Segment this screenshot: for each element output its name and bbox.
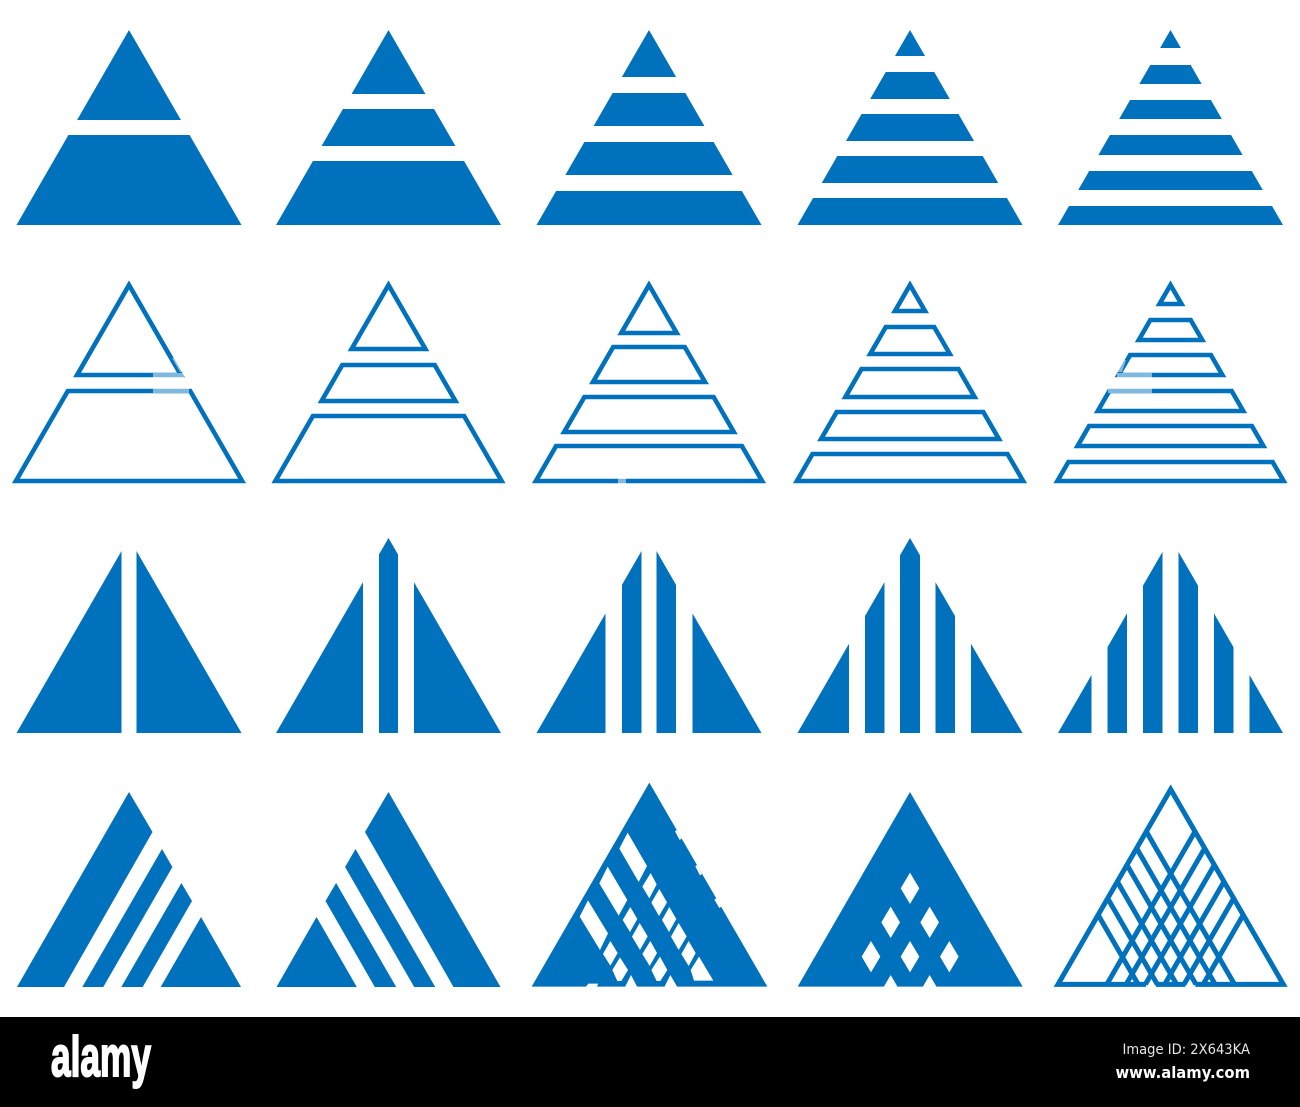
icon: outlined pyramid with 2 bands: [16, 285, 242, 481]
icon: solid pyramid with 6 bands: [1058, 30, 1284, 225]
icon: pyramid split into 5 vertical parts: [797, 538, 1023, 733]
icon: outlined pyramid with 3 bands: [275, 285, 502, 481]
icon: solid pyramid with 3 bands: [276, 30, 502, 225]
row 3: solid pyramids with vertical stripes: [16, 538, 1284, 733]
icon: solid pyramid with 5 bands: [797, 30, 1023, 225]
row 4: diagonal and lattice pyramids: [17, 783, 1283, 987]
logo: alamy wordmark: alamy: [51, 1025, 151, 1089]
icon: pyramid with diagonal stripes rising left: [276, 792, 500, 987]
icon: outlined pyramid with 4 bands: [536, 285, 762, 481]
icon: outlined pyramid with 5 bands: [797, 285, 1023, 481]
icon: outlined pyramid with crossing lattice lines: [1058, 789, 1283, 986]
footer bar: [0, 1017, 1300, 1107]
icon: outlined pyramid with 6 bands: [1057, 285, 1284, 481]
row 2: outlined pyramids with horizontal bands: [16, 285, 1284, 481]
icon: solid pyramid with diamond cut-outs: [798, 792, 1023, 987]
icon: solid pyramid with diagonal lattice cut-outs: [532, 783, 767, 987]
icon: solid pyramid with 2 bands: [16, 30, 242, 225]
icon: pyramid with diagonal stripes rising right: [17, 792, 241, 987]
icon: pyramid split into 4 vertical parts: [536, 538, 762, 733]
icon: pyramid split into 2 vertical parts: [16, 538, 242, 733]
icon: solid pyramid with 4 bands: [536, 30, 762, 225]
row 1: solid pyramids with horizontal bands: [16, 30, 1284, 225]
icon: pyramid split into 6 vertical parts: [1058, 538, 1284, 733]
icon: pyramid split into 3 vertical parts: [276, 538, 502, 733]
website: www.alamy.com: [1116, 1063, 1250, 1082]
image id: Image ID: 2X643KA: [1122, 1042, 1250, 1058]
